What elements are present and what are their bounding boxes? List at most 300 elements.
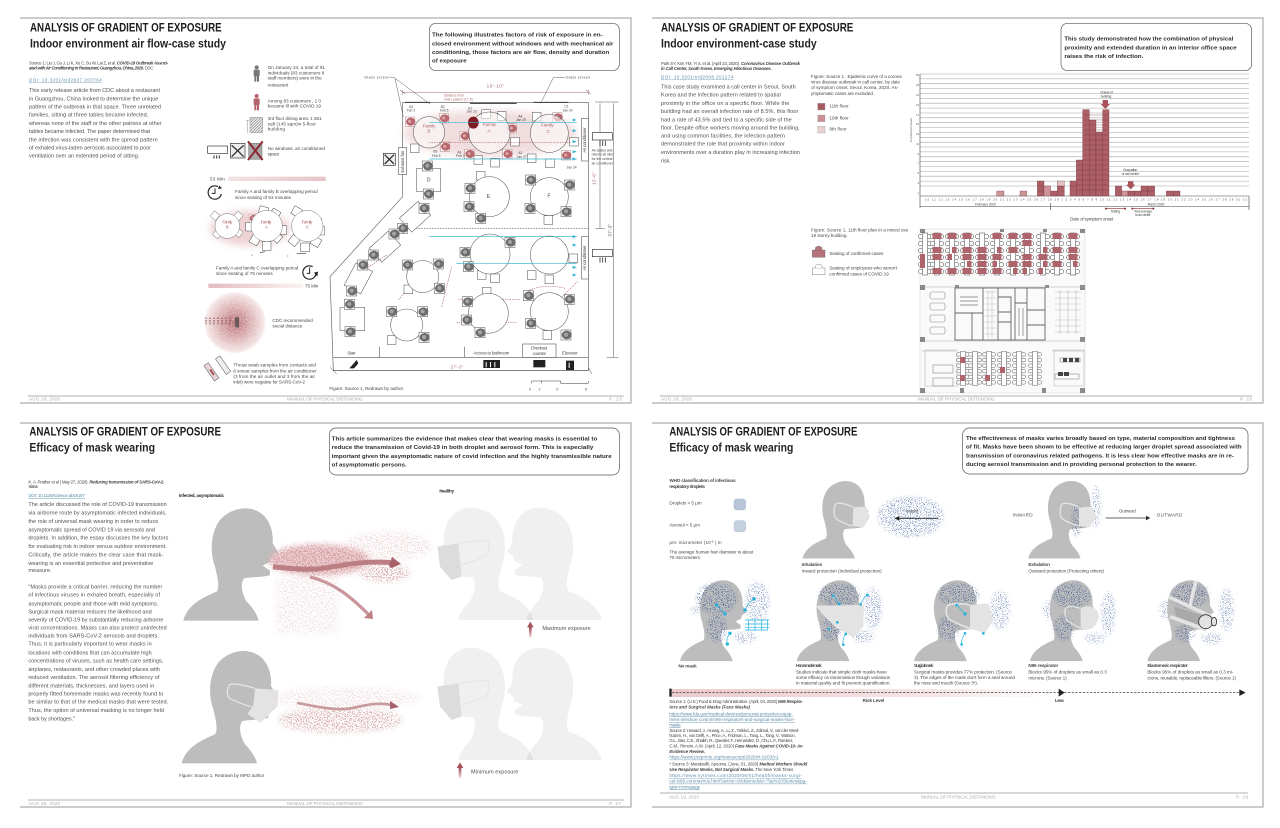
diagram: family tables overlap: C	[306, 225, 310, 230]
footer: page 28: P. 28	[1236, 794, 1248, 800]
chart: epidemic curve: of call center	[1122, 172, 1140, 176]
body text: in Guangzhou, China looked to determine the unique	[29, 96, 158, 102]
body text: families, sitting at three tables became infected,	[29, 113, 149, 119]
floor plan: restaurant: Air conditioner	[582, 245, 587, 271]
droplet classification: -6	[711, 539, 714, 543]
callout: page 27	[329, 428, 619, 475]
source citation	[29, 61, 169, 82]
panel: page 26 call center case study	[652, 18, 1263, 403]
diagram: inhalation: Inward	[906, 508, 919, 513]
arrow: risk level scale: Risk Level	[863, 698, 884, 703]
head: infected with mask	[182, 651, 278, 763]
droplet classification: ) m	[713, 540, 722, 545]
body text: the role of universal mask wearing in order to reduce	[28, 519, 158, 525]
callout: page 25: closed environment without windows and with mechanical air	[432, 41, 614, 47]
callout: page 28: ducing aerosol transmission and in providing personal protection to the wearer.	[966, 462, 1197, 468]
source citation: Source 1: Liu J, Gu J, Li K, Xu C, Su W, Lai Z, et al. COVID-19 Outbreak Associ-	[29, 61, 169, 66]
sources: huizen, H., von Delft, A., Price, A., Fridman, L., Tang, L., Tang, V., Watson,	[669, 733, 796, 738]
diagram: surgical mask: Surgical masks provides 77% protection. (Source	[914, 670, 1012, 675]
sources: Source 1: (U.S.) Food & Drug Administration. (April, 04, 2020) N95 Respira-	[669, 699, 803, 704]
legend: floors: 9th floor	[829, 127, 847, 132]
chart: epidemic curve: 25	[916, 73, 920, 77]
text: social distance: CDC recommended	[272, 318, 313, 323]
scale bar: 6'	[585, 388, 588, 392]
chart: epidemic curve: Date of symptom onset	[1070, 217, 1114, 222]
title: page 28	[669, 425, 857, 454]
body text	[28, 88, 162, 160]
footer: page 26: P. 26	[1240, 396, 1252, 402]
callout: page 27: reduce the transmission of Covid-19 in both droplet and aerosol form. This is especially	[332, 445, 594, 451]
sources: ment-infection-control/n95-respirators-and-surgical-masks-face-	[669, 717, 795, 722]
source citation: ated with Air Conditioning in Restaurant, Guangzhou, China, 2020. CDC	[29, 65, 153, 70]
stat: dining area: sqft (145 sqm)in 5-floor	[268, 121, 316, 126]
body text: and using common facilities, the infection pattern	[661, 134, 785, 140]
floor plan: restaurant: Jan 29	[516, 118, 526, 122]
diagram: social distance rings	[204, 292, 266, 353]
sources: https://www.fda.gov/medical-devices/personal-protective-equip-	[669, 711, 793, 716]
callout: page 26: proximity and extended duration in an interior office space	[1064, 45, 1237, 51]
callout: page 26	[1061, 23, 1252, 71]
icon: floor area	[246, 117, 263, 133]
legend: floors: 11th floor	[829, 104, 849, 109]
body text: droplets. In addition, the essay discusses the key factors	[28, 536, 169, 542]
source citation	[661, 61, 801, 79]
arrow: maximum exposure: Maximum exposure	[542, 626, 591, 632]
footer: page 27: P. 27	[609, 801, 621, 806]
callout: page 25: The following illustrates factors of risk of exposure in en-	[432, 33, 603, 39]
callout: page 28: transmission of coronavirus related pathogens. It is less clear how effective masks are in re-	[966, 453, 1234, 459]
scale bar: 3'	[556, 388, 559, 392]
chart: epidemic curve: 11	[916, 142, 920, 146]
body text: floor. Despite office workers moving around the building,	[661, 125, 800, 131]
floor plan: restaurant: Family	[541, 123, 554, 128]
sources: tors and Surgical Masks (Face Masks)	[669, 704, 751, 709]
arrow: minimum exposure: Minimum exposure	[471, 769, 518, 775]
footer: page 28: AUG 19, 2020	[669, 794, 699, 800]
chart: epidemic curve: Closure of	[1100, 90, 1113, 94]
floor plan: restaurant: Glass screen	[364, 76, 389, 80]
stat: total individuals: restaurant	[268, 82, 289, 87]
diagram: homemade mask: in material quality and fit prevent quantification.	[796, 681, 891, 686]
chart: epidemic curve: to an center	[1135, 213, 1152, 217]
body text: different materials, thicknesses, and layers used in	[28, 683, 154, 689]
legend: seating not confirmed	[812, 264, 898, 277]
diagram: no mask	[678, 580, 769, 668]
source citation: DOI: 10.3201/eid2607.200764	[29, 77, 102, 82]
diagram: homemade mask: some efficacy on transmission though variations	[796, 675, 891, 680]
chart: epidemic curve: 3	[918, 181, 920, 185]
droplet classification: The average human hair diameter is about	[669, 550, 754, 555]
diagram: family tables overlap: A	[265, 225, 269, 230]
figure caption: epidemic curve: ymptomatic cases are excluded.	[811, 91, 874, 96]
diagram: surgical mask: Surgical mask	[914, 663, 934, 668]
diagram: no mask: No mask	[678, 663, 697, 668]
floor plan: restaurant: A	[487, 128, 491, 133]
floor plan: restaurant: Feb 2	[456, 154, 465, 158]
body text: properly fitted homemade masks was recently found to	[28, 692, 163, 698]
droplet classification: 70 micrometers	[669, 555, 701, 560]
body text: asymptomatic people and those with mild symptoms.	[28, 601, 159, 607]
duration bar: 75 min: 75 Min	[305, 284, 319, 289]
duration bar: 75 min	[208, 284, 319, 289]
diagram: exhalation: OUTWARD	[1157, 512, 1183, 517]
text: overlap A C	[216, 265, 299, 276]
body text: ventilation over an extended period of sitting.	[29, 154, 140, 160]
callout: page 28: The effectiveness of masks varies broadly based on type, material composition and tightness	[966, 436, 1235, 442]
floor plan: restaurant: Glass screen	[566, 76, 590, 80]
text: swab samples: (3 from the air outlet and 3 from the air	[233, 374, 315, 379]
source citation: K. A. Prather et al ( May 27, 2020). Reducing transmission of SARS-CoV-2.	[28, 479, 164, 484]
diagram: family tables overlap	[210, 206, 324, 256]
floor plan: restaurant: Stair	[347, 350, 356, 355]
sources: G.L., Bax, C.E., Shaikh, R., Questier, F., Hernandez, D., Chu, L.F., Ramirez,	[669, 738, 793, 743]
text: overlap A B: Family A and family B overlapping period	[235, 189, 318, 194]
duration bar: 53 min	[210, 177, 326, 182]
floor plan: restaurant: B1	[409, 105, 414, 109]
floor plan: restaurant: Access to bathroom	[473, 350, 510, 355]
diagram: surgical mask: the nose and mouth (Source 3*).	[914, 681, 978, 686]
diagram: N95 respirator: microns. (Source 1)	[1028, 676, 1067, 681]
scale bar: 0	[529, 388, 531, 392]
callout: page 27: This article summarizes the evidence that makes clear that wearing masks is essential to	[332, 437, 598, 443]
floor plan: restaurant: Jan 23	[467, 110, 477, 114]
title: page 28: Efficacy of mask wearing	[669, 440, 793, 454]
floor plan: restaurant: air conditioner	[592, 161, 614, 165]
stat: total individuals	[268, 65, 325, 87]
text: swab samples	[233, 362, 317, 385]
legend: seating not confirmed: confirmed cases of COVID 19	[829, 272, 889, 277]
diagram: exhalation: Exhalation	[1028, 562, 1050, 567]
source citation: DOI: 10.1126/science.abc6197	[28, 493, 85, 498]
body text: of infectious viruses in exhaled breath, especially of	[28, 593, 160, 599]
sources: * Source 3: Mandavilli, Apoorva. (June, 01, 2020) Medical Workers Should	[669, 761, 808, 766]
floor plan: restaurant: C1	[564, 105, 569, 109]
floor plan: restaurant: Jan 27	[517, 155, 527, 159]
body text: building had an overall infection rate of 8.5%, this floor	[661, 109, 799, 115]
chart: epidemic curve: February 2020	[975, 203, 996, 207]
risk scale arrowheads and less label: Less	[1055, 698, 1064, 703]
floor plan: restaurant: Air added and	[592, 149, 612, 153]
body text: individuals from SARS-CoV-2 aerosols and droplets.	[28, 634, 159, 640]
floor plan: restaurant: A3	[457, 150, 462, 154]
callout: page 25	[429, 23, 619, 71]
text: no windows	[268, 146, 325, 157]
chart: epidemic curve: 21	[916, 93, 920, 97]
sources: Evidence Review.	[669, 749, 705, 754]
body text: be similar to that of the medical masks that were tested.	[28, 700, 169, 706]
callout: page 26: raises the risk of infection.	[1064, 54, 1144, 60]
risk scale arrowheads and less label	[1055, 689, 1246, 703]
footer: page 27	[29, 801, 621, 806]
body text: back by shortages."	[28, 716, 75, 722]
body text: demonstrated the role that proximity within indoor	[661, 142, 785, 148]
diagram: N95 respirator: N95 respirator	[1028, 663, 1059, 668]
figure caption: floor plan	[811, 227, 909, 238]
figure caption: epidemic curve: of symptom onset, Seoul, Korea, 2020. As-	[811, 85, 899, 90]
chart: epidemic curve: March 2020	[1148, 203, 1164, 207]
floor plan: restaurant: A2	[518, 151, 523, 155]
diagram: exhalation: INWARD	[1013, 512, 1033, 517]
scale bar: 1'	[538, 388, 541, 392]
floor plan: restaurant: Checkout	[531, 345, 548, 350]
callout: page 27: of asymptomatic persons.	[332, 463, 407, 469]
floor plan: restaurant: C	[547, 129, 551, 134]
floor plan: restaurant: B2	[441, 105, 445, 109]
floor plan: restaurant: Feb 3	[407, 109, 415, 113]
footer: page 27: AUG 19, 2020	[29, 801, 60, 806]
title: page 25: Indoor environment air flow-case study	[30, 36, 226, 50]
floor plan: restaurant: 27'-3"	[451, 365, 464, 370]
title: page 25	[30, 21, 226, 50]
body text: severity of COVID-19 by substantially reducing airborne	[28, 618, 163, 624]
floor plan: restaurant: A4	[518, 115, 523, 119]
floor plan: restaurant: E	[487, 194, 491, 200]
diagram: surgical mask	[914, 580, 1015, 686]
title: page 26: Indoor environment-case study	[661, 36, 817, 50]
diagram: family tables overlap: Family	[222, 219, 233, 224]
source citation: Park SY, Kim YM, Yi S, et al. (April 23, 2020). Coronavirus Disease Outbreak	[661, 61, 801, 66]
diagram: elastomeric respirator	[1147, 580, 1236, 681]
diagram: elastomeric respirator: Blocks 95% of droplets as small as 0.3 mi-	[1147, 670, 1234, 675]
callout: page 28	[963, 428, 1248, 474]
text: overlap A B	[235, 189, 318, 200]
floor plan: restaurant: Air conditioner	[582, 127, 587, 153]
stat: infected customers: Among 83 customers , 1 0	[268, 98, 321, 103]
callout: page 25: conditioning, those factors are air flow, density and duration	[432, 50, 610, 56]
arrow: minimum exposure	[457, 762, 518, 778]
body text: whereas none of the staff or the other patrons at other	[28, 121, 162, 127]
floor plan: restaurant: B3	[433, 150, 438, 154]
droplet classification: Droplets > 5 μm	[669, 501, 702, 506]
icon: person pink	[254, 94, 260, 110]
legend: seating confirmed: Seating of confirmed cases	[829, 251, 884, 256]
floor plan: restaurant: A1	[468, 106, 472, 110]
body text: had a rate of 43.5% and tied to a specific side of the	[661, 117, 792, 123]
panel: page 28 mask types	[652, 423, 1263, 807]
droplet classification: WHO classification of infectious	[669, 478, 736, 483]
floor plan: restaurant: B	[427, 129, 430, 134]
diagram: homemade mask: Homemade mask	[796, 663, 822, 668]
duration bar: 53 min: 53 Min	[210, 177, 225, 182]
chart: epidemic curve: 17	[916, 113, 920, 117]
sources	[669, 699, 808, 789]
diagram: inhalation: Inhalation	[802, 562, 822, 567]
droplet classification	[669, 478, 754, 560]
floor plan: restaurant: counter	[533, 351, 547, 356]
chart: epidemic curve: 15	[916, 122, 920, 126]
body text: This early release article from CDC about a restaurant	[29, 88, 160, 94]
stat: dining area: building	[268, 127, 285, 132]
arrow: maximum exposure	[527, 622, 591, 637]
plume: masked exhalation	[270, 687, 420, 733]
footer: page 25	[29, 396, 622, 402]
floor plan: 11th floor seating	[918, 229, 1085, 393]
head: infected no mask	[183, 508, 278, 621]
diagram: inhalation: Inward protection (individual protection)	[802, 569, 882, 574]
diagram: inhalation	[802, 481, 944, 574]
source citation: in Call Center, South Korea. Emerging Infectious Diseases.	[661, 66, 772, 71]
chart: epidemic curve	[909, 73, 1249, 222]
sources: type=Homepage	[669, 784, 700, 789]
footer: page 25: AUG 19, 2020	[29, 396, 60, 402]
chart: epidemic curve: building	[1101, 94, 1111, 98]
text: overlap A C: since seating of 75 minutes	[216, 271, 273, 276]
body text: wearing is an essential protective and preventative	[27, 561, 153, 567]
stat: infected customers	[268, 98, 321, 109]
plume: unmasked exhalation	[268, 531, 432, 634]
diagram: exhalation: Outward	[1119, 508, 1136, 513]
legend: seating not confirmed: Seating of employees who weren't	[829, 266, 898, 271]
body text: Critically, the article makes the clear case that mask-	[28, 553, 164, 559]
chart: epidemic curve: 13	[916, 132, 920, 136]
sources: masks	[669, 722, 681, 727]
floor plan: restaurant: F	[547, 194, 551, 200]
arrow: risk level scale	[669, 689, 1240, 703]
diagram: family tables overlap: Family	[302, 219, 313, 224]
body text: tables became infected. The paper determined that	[29, 129, 150, 135]
body text: Korea and the infection pattern related to spatial	[661, 93, 781, 99]
diagram: elastomeric respirator: Elastomeric respirator	[1147, 663, 1188, 668]
callout: page 25: of exposure	[432, 58, 467, 64]
body text: "Masks provide a critical barrier, reducing the number	[28, 584, 163, 590]
sources: cal-N95-coronavirus.html?action=click&module=Top%20Stories&pg-	[669, 779, 807, 784]
body text: This case study examined a call center in Seoul, South	[661, 84, 796, 90]
text: swab samples: Throat swab samples from contacts and	[233, 362, 316, 367]
callout: page 28: of fit. Masks have been shown to be effective at reducing larger droplet spread associated with	[966, 444, 1242, 450]
chart: epidemic curve: 10 11 12 13 14 15 16 17 18 19 20 21 22 23 24 25 26 27 28 29 1 2 3 4 5 6 7 8 9 10 11 12 13 14 15 16 17 18 19 20 21 22 23 24 25 26 27 28 29 30 31	[925, 198, 1247, 202]
floor plan: restaurant: Jan 24	[567, 166, 577, 170]
body text: measure.	[28, 568, 52, 574]
caption: Figure: Source 1, Redrawn by author.	[329, 386, 404, 391]
title: page 25: ANALYSIS OF GRADIENT OF EXPOSURE	[30, 21, 222, 35]
droplet classification: respiratory droplets	[669, 484, 705, 489]
footer: page 28	[669, 794, 1248, 800]
chart: epidemic curve: Confirmed cases	[909, 118, 913, 142]
icon: clock 75	[303, 266, 318, 279]
floor plan: restaurant: Family	[423, 123, 436, 128]
panel: page 25 restaurant air flow case study	[20, 18, 631, 403]
title: page 27: Efficacy of mask wearing	[29, 440, 155, 454]
title: page 27: ANALYSIS OF GRADIENT OF EXPOSURE	[29, 425, 221, 439]
diagram: N95 respirator	[1028, 580, 1116, 681]
healthy heads: bottom	[437, 648, 602, 760]
label: healthy: Healthy	[439, 489, 455, 494]
body text: for evaluating risk in indoor versus outdoor environment.	[28, 544, 167, 550]
floor plan: restaurant: Feb 5	[432, 154, 441, 158]
figure caption: epidemic curve: virus disease outbreak in call center, by date	[811, 79, 900, 84]
legend: seating confirmed	[812, 246, 884, 257]
chart: epidemic curve: 5	[918, 171, 920, 175]
floor plan: restaurant: Family	[483, 122, 497, 127]
stat: dining area	[268, 116, 322, 132]
scale bar	[529, 381, 588, 392]
panel: page 27 mask wearing evidence	[20, 423, 631, 807]
floor plan: restaurant: Feb 5	[440, 109, 449, 113]
chart: epidemic curve: 1	[918, 191, 920, 195]
diagram: homemade mask	[796, 580, 891, 686]
chart: epidemic curve: Test average	[1134, 209, 1152, 213]
caption: Figure: Source 1. Redrawn by MPD author	[179, 773, 265, 778]
sources: Use Respirator Masks, Not Surgical Masks. The New York Times	[669, 767, 793, 772]
diagram: elastomeric respirator: crons, reusable, replaceable filters. (Source 1)	[1147, 676, 1236, 681]
footer: page 25: P. 25	[609, 396, 622, 402]
figure caption: epidemic curve	[811, 74, 902, 96]
figure caption: epidemic curve: Figure: Source 1 , Epidemic curve of a corona	[811, 74, 902, 79]
footer: page 28: MANUAL OF PHYSICAL DISTANCING	[921, 794, 996, 800]
droplet classification: μm: micrometer (10	[669, 540, 711, 545]
text: no windows: No windows, air conditioned	[268, 146, 325, 151]
body text: The article discussed the role of COVID-19 transmission	[28, 502, 167, 508]
body text: proximity in the office on a specific floor. While the	[661, 101, 789, 107]
source citation: Science.	[28, 484, 39, 489]
stat: total individuals: staff members) were in the	[268, 76, 322, 81]
body text	[661, 84, 800, 164]
body text: of exhaled virus-laden aerosols associated to poor	[29, 145, 151, 151]
text: no windows: space	[268, 152, 280, 157]
floor plan: restaurant: Exhaust fan	[400, 150, 405, 173]
diagram: family tables overlap: B	[226, 225, 229, 230]
stat: dining area: 3rd floor dining area: 1 561	[268, 116, 322, 121]
floor plan: restaurant: Elevator	[562, 350, 578, 355]
body text: locations with conditions that can accumulate high	[28, 650, 152, 656]
chart: epidemic curve: 7	[918, 161, 920, 165]
body text: Surgical mask material reduces the likelihood and	[28, 609, 152, 615]
diagram: N95 respirator: Blocks 95% of droplets as small as 0.3	[1028, 670, 1107, 675]
text: swab samples: 6 smear samples from the air conditioner	[233, 368, 317, 373]
body text: asymptomatic spread of COVID 19 via aerosols and	[28, 527, 155, 533]
body text: concentrations of viruses, such as health care settings,	[28, 658, 164, 664]
icons: air conditioner, fan, no window	[208, 141, 263, 160]
body text: via airborne route by asymptomatic infected individuals,	[28, 511, 167, 517]
text: overlap A B: since seating of 53 minutes	[235, 195, 292, 200]
floor plan: restaurant: 12'-6"	[591, 172, 596, 185]
stat: total individuals: On January 24, a total of 91	[268, 65, 325, 70]
floor plan: restaurant: D	[427, 178, 431, 184]
body text: airplanes, restaurants, and other crowded places with	[28, 667, 160, 673]
source citation: DOI: 10.3201/eid2608.201274	[661, 74, 734, 79]
body text: Thus, the option of universal masking is no longer held	[28, 708, 164, 714]
body text: viral concentrations. Masks can also protect uninfected	[28, 626, 167, 632]
sources: Source 2: Howard, J., Huang, A., Li, Z., Tufekci, Z., Zdimal, V., van der West-	[669, 728, 800, 733]
footer: page 26	[661, 396, 1252, 402]
text: overlap A C: Family A and family C overlapping period	[216, 265, 299, 270]
chart: epidemic curve: Evacuation	[1123, 168, 1137, 172]
source citation	[28, 479, 164, 498]
icon: person grey	[254, 65, 260, 82]
figure caption: floor plan: Figure: Source 1, 11th floor plan in a mixed use	[811, 227, 909, 232]
callout: page 27: important given the asymptomatic nature of covid infection and the highly transmissible nature	[332, 454, 612, 460]
body text	[27, 502, 169, 722]
floor plan: restaurant	[330, 76, 618, 374]
icon: swab test tubes	[204, 356, 231, 381]
floor plan: restaurant: 19'-10"	[487, 83, 504, 88]
footer: page 25: MANUAL OF PHYSICAL DISTANCING	[287, 396, 363, 402]
icon: clock 53	[208, 186, 222, 199]
title: page 26	[661, 21, 853, 50]
floor plan: restaurant: for the central	[592, 157, 613, 161]
chart: epidemic curve: 19	[916, 103, 920, 107]
diagram: exhalation	[1013, 481, 1183, 574]
floor plan: restaurant: index patient (17.9')	[444, 98, 473, 102]
stat: infected customers: became ill with COVID 19	[268, 104, 321, 109]
footer: page 27: MANUAL OF PHYSICAL DISTANCING	[287, 801, 363, 806]
floor plan: restaurant: returns air inlet	[592, 153, 613, 157]
diagram: homemade mask: Studies indicate that simple cloth masks have	[796, 670, 887, 675]
legend: floors	[818, 103, 849, 133]
healthy heads: top	[437, 508, 602, 620]
sources: C.M., Rimoin, A.W. (April, 12, 2020) Face Masks Against COVID-19: An	[669, 744, 803, 749]
body text: Thus, it is particularly important to wear masks in	[28, 642, 152, 648]
